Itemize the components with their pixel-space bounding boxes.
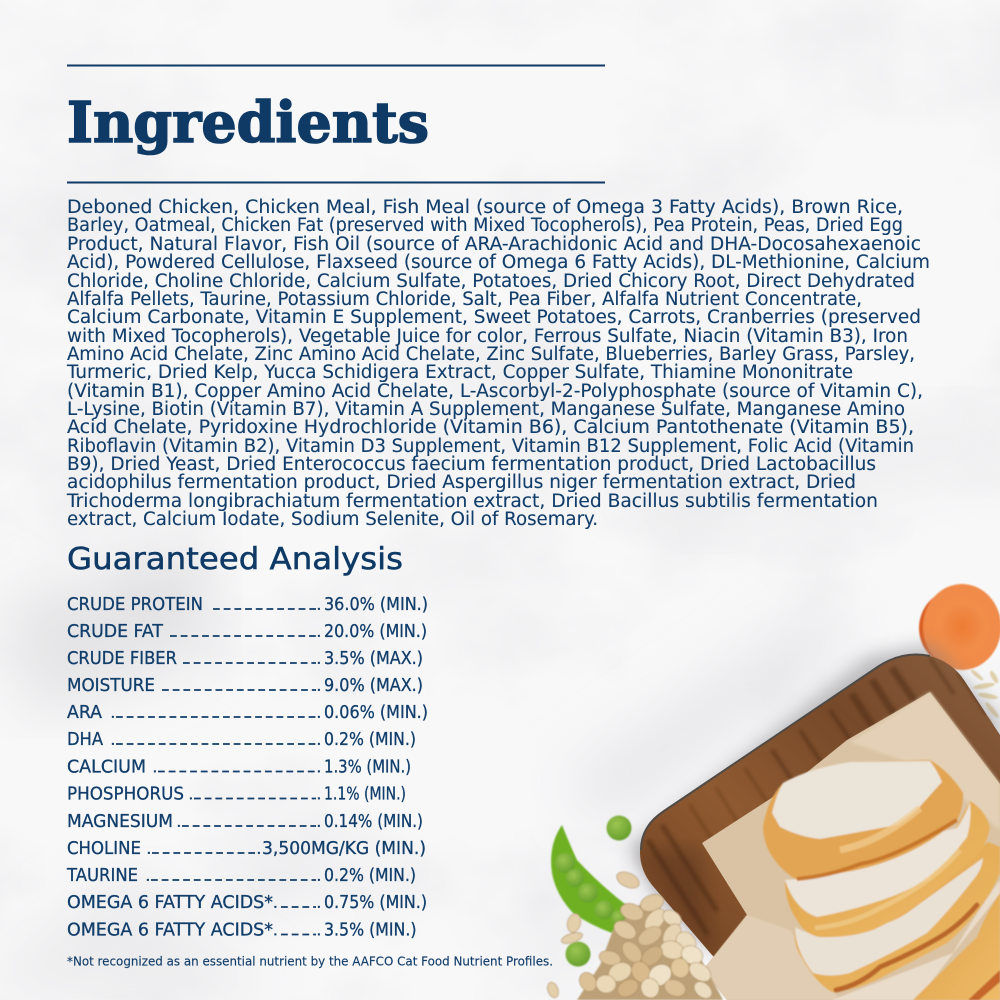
photo: wooden board bbox=[638, 654, 1000, 957]
row: moisture: 9.0% (MAX.) bbox=[324, 676, 423, 696]
chicken slice 1 bbox=[763, 760, 963, 880]
row: omega 6 fatty acids 3.5 bbox=[67, 920, 416, 940]
ingredients paragraph: Deboned Chicken, Chicken Meal, Fish Meal (source of Omega 3 Fatty Acids), Brown Rice, bbox=[67, 197, 903, 218]
row: ara: 0.06% (MIN.) bbox=[324, 703, 428, 723]
footnote: *Not recognized as an essential nutrient by the AAFCO Cat Food Nutrient Profiles. bbox=[67, 954, 553, 968]
top rule bbox=[67, 64, 605, 66]
row: crude fiber bbox=[67, 649, 423, 669]
photo: parchment paper bbox=[702, 692, 1000, 1000]
photo: loose peas bbox=[566, 816, 632, 966]
ingredients paragraph: Acid Chelate, Pyridoxine Hydrochloride (Vitamin B6), Calcium Pantothenate (Vitamin B5), bbox=[67, 417, 914, 438]
photo: rice grains bbox=[970, 668, 1000, 732]
row: choline: 3,500MG/KG (MIN.) bbox=[262, 839, 426, 859]
row: crude protein bbox=[67, 595, 428, 615]
row: dha: DHA bbox=[67, 730, 103, 750]
row: crude protein: 36.0% (MIN.) bbox=[324, 595, 428, 615]
ingredients paragraph: Barley, Oatmeal, Chicken Fat (preserved with Mixed Tocopherols), Pea Protein, Peas, Dried Egg bbox=[67, 215, 903, 236]
row: taurine: TAURINE bbox=[66, 866, 138, 886]
row: phosphorus: 1.1% (MIN.) bbox=[324, 784, 406, 804]
ingredients paragraph: Alfalfa Pellets, Taurine, Potassium Chloride, Salt, Pea Fiber, Alfalfa Nutrient Concentrate, bbox=[67, 289, 862, 310]
ingredients paragraph: (Vitamin B1), Copper Amino Acid Chelate, L-Ascorbyl-2-Polyphosphate (source of Vitamin C), bbox=[67, 381, 923, 402]
row: crude fiber: 3.5% (MAX.) bbox=[324, 649, 423, 669]
heading: Guaranteed Analysis: Guaranteed Analysis bbox=[67, 542, 403, 577]
row: omega 6 fatty acids 3.5: 3.5% (MIN.) bbox=[324, 920, 416, 940]
photo: chicken slices bbox=[763, 760, 1000, 1000]
row: calcium: CALCIUM bbox=[67, 758, 146, 778]
ingredients paragraph: Turmeric, Dried Kelp, Yucca Schidigera Extract, Copper Sulfate, Thiamine Mononitrate bbox=[66, 362, 853, 383]
ingredients paragraph bbox=[66, 197, 930, 530]
ingredients paragraph: L-Lysine, Biotin (Vitamin B7), Vitamin A Supplement, Manganese Sulfate, Manganese Amino bbox=[67, 399, 905, 420]
photo: oat pile bbox=[546, 869, 723, 1000]
row: dha bbox=[67, 730, 416, 750]
row: moisture: MOISTURE bbox=[67, 676, 155, 696]
ingredients paragraph: extract, Calcium Iodate, Sodium Selenite, Oil of Rosemary. bbox=[67, 509, 598, 530]
row: crude fat: 20.0% (MIN.) bbox=[324, 622, 427, 642]
row: phosphorus: PHOSPHORUS bbox=[67, 784, 184, 804]
ingredients paragraph: Chloride, Choline Chloride, Calcium Sulfate, Potatoes, Dried Chicory Root, Direct Dehydrated bbox=[67, 271, 915, 292]
ingredients paragraph: Trichoderma longibrachiatum fermentation extract, Dried Bacillus subtilis fermentation bbox=[66, 491, 878, 512]
row: crude fat bbox=[67, 622, 427, 642]
ingredients paragraph: Acid), Powdered Cellulose, Flaxseed (source of Omega 6 Fatty Acids), DL-Methionine, Calcium bbox=[67, 252, 930, 273]
row: choline: CHOLINE bbox=[67, 839, 141, 859]
row: phosphorus bbox=[67, 784, 406, 804]
row: calcium bbox=[67, 758, 411, 778]
chicken slice 3 bbox=[795, 842, 1000, 992]
row: crude fat: CRUDE FAT bbox=[67, 622, 163, 642]
row: crude protein: CRUDE PROTEIN bbox=[67, 595, 203, 615]
chicken slice 2 bbox=[785, 801, 990, 937]
row: omega 6 fatty acids 3.5: OMEGA 6 FATTY ACIDS* bbox=[67, 920, 273, 940]
ingredients paragraph: acidophilus fermentation product, Dried Aspergillus niger fermentation extract, Dried bbox=[67, 472, 856, 493]
chicken slice 4 bbox=[832, 880, 1000, 1000]
ingredients paragraph: Amino Acid Chelate, Zinc Amino Acid Chelate, Zinc Sulfate, Blueberries, Barley Grass, Parsley, bbox=[67, 344, 915, 365]
row: ara: ARA bbox=[67, 703, 102, 723]
row: omega 6 fatty acids 0.75: 0.75% (MIN.) bbox=[324, 893, 427, 913]
row: magnesium: MAGNESIUM bbox=[67, 812, 173, 832]
row: crude fiber: CRUDE FIBER bbox=[67, 649, 177, 669]
lower rule bbox=[67, 182, 605, 184]
row: moisture bbox=[67, 676, 423, 696]
ingredients paragraph: Product, Natural Flavor, Fish Oil (source of ARA-Arachidonic Acid and DHA-Docosahexaenoic bbox=[67, 234, 921, 255]
row: ara bbox=[67, 703, 428, 723]
row: magnesium: 0.14% (MIN.) bbox=[324, 812, 423, 832]
row: magnesium bbox=[67, 812, 423, 832]
row: omega 6 fatty acids 0.75: OMEGA 6 FATTY ACIDS* bbox=[67, 893, 273, 913]
row: choline bbox=[67, 839, 426, 859]
photo: pea pod bbox=[551, 825, 630, 933]
row: omega 6 fatty acids 0.75 bbox=[67, 893, 427, 913]
ingredients paragraph: with Mixed Tocopherols), Vegetable Juice for color, Ferrous Sulfate, Niacin (Vitamin B3), Iron bbox=[67, 326, 908, 347]
ingredients paragraph: Riboflavin (Vitamin B2), Vitamin D3 Supplement, Vitamin B12 Supplement, Folic Acid (Vitamin bbox=[67, 436, 914, 457]
guaranteed analysis table bbox=[66, 595, 428, 940]
photo: board shadow bbox=[628, 644, 1000, 960]
ingredients paragraph: B9), Dried Yeast, Dried Enterococcus faecium fermentation product, Dried Lactobacillus bbox=[67, 454, 876, 475]
row: dha: 0.2% (MIN.) bbox=[324, 730, 416, 750]
ingredients paragraph: Calcium Carbonate, Vitamin E Supplement, Sweet Potatoes, Carrots, Cranberries (preserved bbox=[67, 307, 921, 328]
row: taurine: 0.2% (MIN.) bbox=[324, 866, 416, 886]
title: Ingredients: Ingredients bbox=[67, 90, 429, 156]
row: calcium: 1.3% (MIN.) bbox=[324, 758, 411, 778]
row: taurine bbox=[66, 866, 416, 886]
photo: carrot slice bbox=[919, 584, 1000, 670]
